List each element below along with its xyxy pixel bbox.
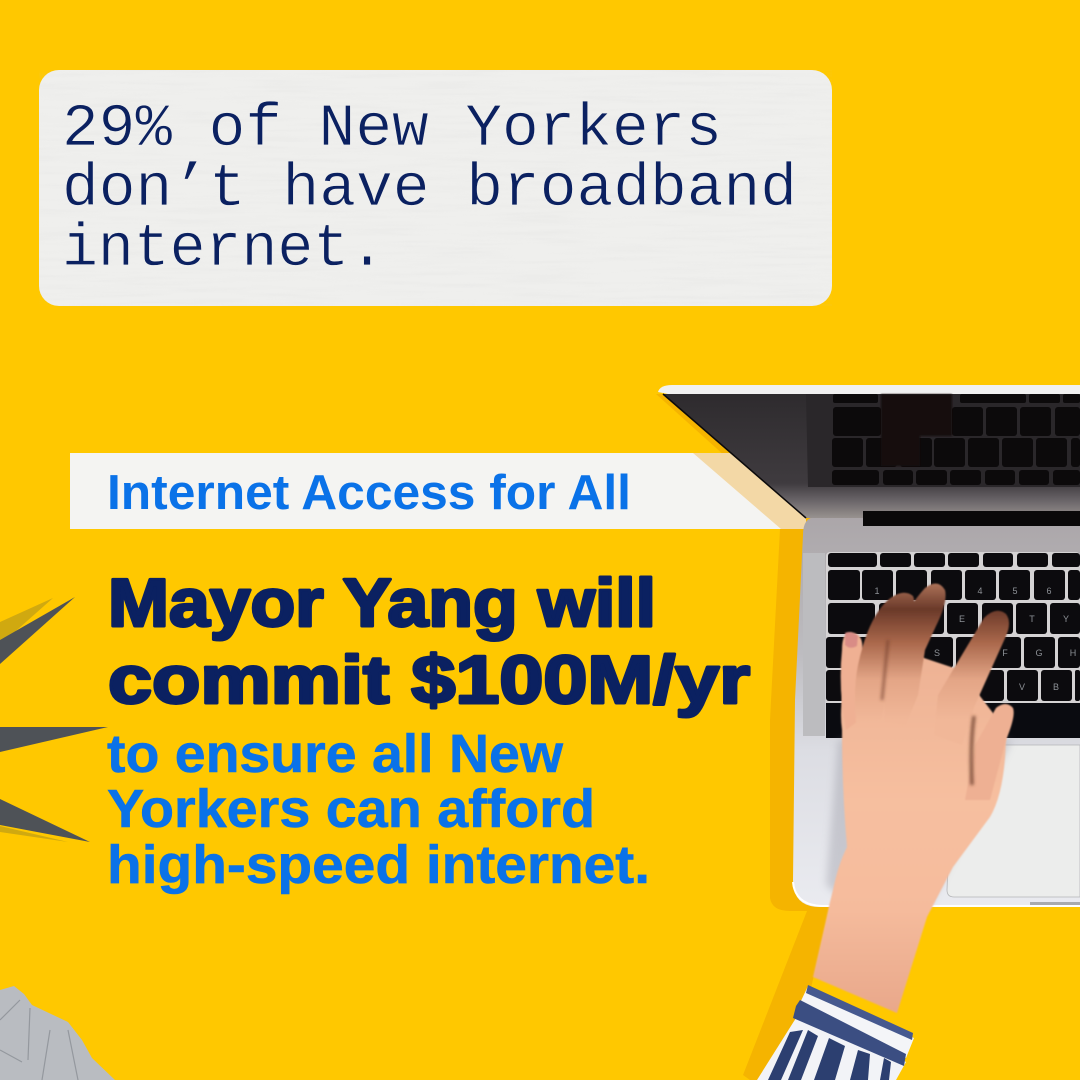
key labels: 5 [1012, 586, 1018, 596]
palm and wrist [813, 650, 1006, 1013]
key labels: 4 [977, 586, 983, 596]
laptop drop shadow [656, 394, 830, 1080]
key labels: E [959, 614, 965, 624]
subheading: high-speed internet. [107, 835, 650, 895]
key labels: Y [1063, 614, 1069, 624]
banner text: Internet Access for All [107, 466, 631, 520]
key labels [874, 586, 1076, 692]
key labels: H [1070, 648, 1076, 658]
hinge [863, 511, 1080, 526]
keyboard [826, 552, 1080, 738]
key labels: T [1029, 614, 1035, 624]
banner: Internet Access for All [70, 453, 806, 529]
headline [108, 565, 750, 718]
hand shadow on laptop [826, 740, 1012, 905]
key labels: 6 [1046, 586, 1052, 596]
illustration: laptop [658, 385, 1080, 907]
key labels: V [1019, 682, 1025, 692]
laptop base [793, 517, 1080, 907]
illustration: hand [757, 583, 1014, 1080]
subheading [107, 724, 650, 895]
headline: Mayor Yang will [108, 565, 656, 641]
key labels: B [1053, 682, 1059, 692]
statistic text: don’t have broadband [62, 156, 797, 224]
key labels: 1 [874, 586, 880, 596]
statistic text: 29% of New Yorkers [62, 96, 722, 164]
headline: commit $100M/yr [108, 642, 750, 718]
icon: starburst spikes [0, 597, 108, 842]
figure: grey shoulder [0, 986, 115, 1080]
key labels: F [1002, 648, 1008, 658]
trackpad [947, 745, 1080, 905]
finger creases [882, 640, 974, 785]
striped sleeve [757, 985, 914, 1080]
subheading: Yorkers can afford [107, 779, 595, 839]
fingers [841, 583, 1014, 800]
panel: statistic card [39, 70, 832, 306]
keyboard reflection [832, 394, 1080, 485]
statistic text: internet. [62, 216, 385, 284]
key labels: G [1035, 648, 1043, 658]
speaker grille [803, 553, 825, 736]
statistic text [62, 96, 797, 284]
subheading: to ensure all New [107, 724, 564, 784]
key labels: S [934, 648, 940, 658]
laptop lid [658, 385, 1080, 518]
